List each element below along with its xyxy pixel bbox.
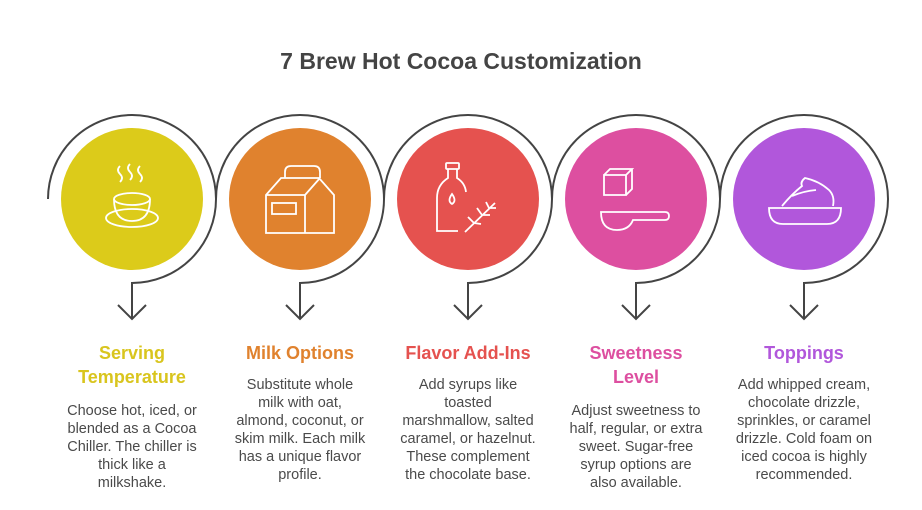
text: milk options — [235, 343, 366, 483]
text: toppings: chocolate drizzle, — [748, 395, 860, 411]
text: serving temperature: thick like a — [98, 457, 166, 473]
diagram — [47, 114, 889, 320]
text: milk options: Milk Options — [246, 343, 354, 363]
text: toppings: iced cocoa is highly — [741, 449, 867, 465]
icon: whipped cream bowl — [769, 178, 841, 224]
text: flavor add-ins: These complement — [406, 449, 530, 465]
step 2 circle — [216, 115, 384, 319]
text: toppings: sprinkles, or caramel — [737, 413, 871, 429]
text: flavor add-ins: caramel, or hazelnut. — [400, 431, 536, 447]
icon: milk carton — [266, 166, 334, 233]
text: serving temperature: Serving — [99, 343, 165, 363]
text: sweetness level: also available. — [590, 475, 682, 491]
text: milk options: Substitute whole — [247, 377, 353, 393]
text: sweetness level: Sweetness — [589, 343, 683, 363]
text: sweetness level: syrup options are — [580, 457, 692, 473]
text: sweetness level: Adjust sweetness to — [572, 403, 700, 419]
step 3 circle — [384, 115, 552, 319]
text: flavor add-ins: Flavor Add-Ins — [405, 343, 531, 363]
text: milk options: milk with oat, — [258, 395, 342, 411]
icon: sugar cube and scoop — [601, 169, 669, 230]
text: milk options: has a unique flavor — [239, 449, 361, 465]
text: flavor add-ins: marshmallow, salted — [402, 413, 534, 429]
text: serving temperature: Chiller. The chiller is — [67, 439, 197, 455]
text: serving temperature: Choose hot, iced, or — [67, 403, 197, 419]
text: sweetness level — [570, 343, 702, 491]
icon: syrup bottle — [437, 163, 496, 232]
text: flavor add-ins — [400, 343, 536, 483]
text: toppings: recommended. — [756, 467, 852, 483]
title: 7 Brew Hot Cocoa Customization — [280, 48, 642, 74]
text: flavor add-ins: Add syrups like — [419, 377, 517, 393]
text: sweetness level: sweet. Sugar-free — [579, 439, 693, 455]
text: sweetness level: half, regular, or extra — [570, 421, 702, 437]
text: milk options: almond, coconut, or — [236, 413, 364, 429]
text: milk options: skim milk. Each milk — [235, 431, 365, 447]
text: sweetness level: Level — [613, 367, 659, 387]
text: flavor add-ins: toasted — [444, 395, 492, 411]
step 1 circle — [48, 115, 216, 319]
step 5 circle — [720, 115, 888, 319]
text: flavor add-ins: the chocolate base. — [405, 467, 531, 483]
text: toppings: Toppings — [764, 343, 844, 363]
text: toppings — [736, 343, 872, 483]
text: serving temperature: blended as a Cocoa — [68, 421, 196, 437]
step 4 circle — [552, 115, 720, 319]
text: serving temperature: milkshake. — [98, 475, 166, 491]
text: milk options: profile. — [278, 467, 322, 483]
text: toppings: drizzle. Cold foam on — [736, 431, 872, 447]
text: serving temperature: Temperature — [78, 367, 186, 387]
icon: cup — [106, 164, 158, 227]
text: toppings: Add whipped cream, — [738, 377, 870, 393]
text: serving temperature — [67, 343, 197, 491]
